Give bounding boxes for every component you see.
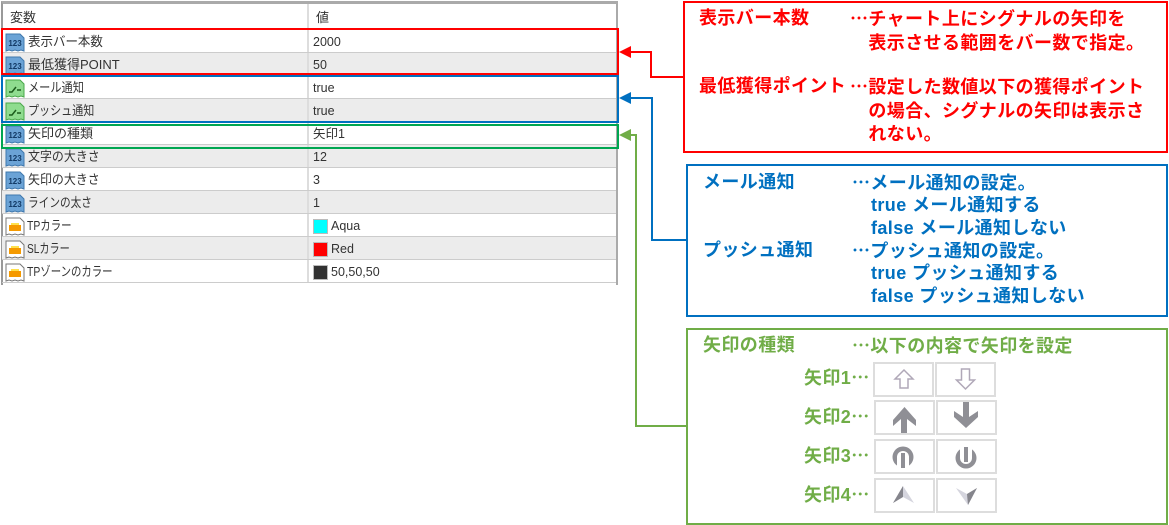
highlight: green row	[1, 124, 619, 149]
icon: arrow 3 down	[936, 439, 997, 474]
icon: arrow 4 up	[874, 478, 935, 513]
row: TP zone color: TPゾーンのカラー	[27, 264, 113, 279]
highlight: red rows	[1, 28, 619, 75]
row: text size: 123	[8, 154, 22, 163]
label: arrow 1: 矢印1…	[804, 364, 870, 390]
table frame	[1, 1, 618, 285]
header row	[10, 4, 329, 28]
icon: arrow 4 down	[936, 478, 997, 513]
description: min points	[850, 73, 1144, 144]
icon: arrow 3 up	[874, 439, 935, 474]
row: TP color	[2, 214, 616, 237]
header: variable: 変数	[10, 10, 36, 25]
row: arrow size: 123	[8, 177, 22, 186]
label: mail: メール通知	[703, 172, 795, 192]
description: push: true プッシュ通知する	[871, 263, 1059, 283]
row: min points	[2, 53, 616, 76]
label: min points: 最低獲得ポイント	[699, 76, 846, 96]
row: arrow size: 3	[313, 173, 320, 187]
panel: parameter table	[1, 1, 618, 285]
row: bars: 123	[8, 39, 22, 48]
row: mail: メール通知	[28, 80, 84, 95]
description: min points: …設定した数値以下の獲得ポイント	[850, 73, 1144, 99]
row: push: true	[313, 104, 335, 118]
row: line width: 1	[313, 196, 320, 210]
icon: arrow 1 up	[873, 362, 934, 397]
row: text size	[2, 145, 616, 168]
description: arrow type: …以下の内容で矢印を設定	[852, 332, 1073, 358]
row: push	[2, 99, 616, 122]
row: TP color: TPカラー	[27, 218, 72, 233]
highlight: blue rows	[1, 75, 619, 123]
description: push	[852, 236, 1085, 306]
description: bars	[850, 5, 1144, 52]
row: bars: 表示バー本数	[28, 34, 103, 49]
row: SL color: SLカラー	[27, 241, 70, 256]
row: text size: 文字の大きさ	[28, 149, 100, 164]
row: TP zone color	[2, 260, 616, 283]
row: line width	[2, 191, 616, 214]
label: push: プッシュ通知	[703, 240, 813, 260]
row: arrow size	[2, 168, 616, 191]
label: arrow 4: 矢印4…	[804, 481, 870, 507]
row: min points: 123	[8, 62, 22, 71]
description: bars: …チャート上にシグナルの矢印を	[850, 5, 1126, 31]
row: TP color: Aqua	[331, 219, 360, 233]
description: mail	[852, 168, 1067, 238]
description: mail: false メール通知しない	[871, 218, 1067, 238]
row: TP zone color: 50,50,50	[331, 265, 380, 279]
description: mail: …メール通知の設定。	[852, 168, 1036, 194]
description: min points: の場合、シグナルの矢印は表示さ	[868, 100, 1144, 120]
row: min points: 最低獲得POINT	[28, 57, 120, 72]
row: arrow type	[2, 122, 616, 145]
label: arrow 3: 矢印3…	[804, 442, 870, 468]
label: arrow type: 矢印の種類	[703, 335, 795, 355]
icon: arrow 2 down	[936, 400, 997, 435]
row: push: プッシュ通知	[28, 103, 94, 118]
icon: arrow 2 up	[874, 400, 935, 435]
description: bars: 表示させる範囲をバー数で指定。	[868, 32, 1144, 52]
panel: green callout	[686, 328, 1168, 525]
row: arrow type: 123	[8, 131, 22, 140]
header: value: 値	[316, 10, 329, 25]
label: bars: 表示バー本数	[699, 8, 809, 28]
icon: arrow 1 down	[935, 362, 996, 397]
row: mail	[2, 76, 616, 99]
row: text size: 12	[313, 150, 327, 164]
description: push: …プッシュ通知の設定。	[852, 236, 1054, 262]
panel: red callout	[683, 1, 1168, 153]
row: line width: 123	[8, 200, 22, 209]
description: mail: true メール通知する	[871, 195, 1041, 215]
row: arrow size: 矢印の大きさ	[28, 172, 100, 187]
row: min points: 50	[313, 58, 327, 72]
row: SL color: Red	[331, 242, 354, 256]
panel: blue callout	[686, 164, 1168, 317]
label: arrow 2: 矢印2…	[804, 403, 870, 429]
row: arrow type: 矢印1	[313, 127, 345, 141]
row: mail: true	[313, 81, 335, 95]
row: bars	[2, 30, 616, 53]
description: push: false プッシュ通知しない	[871, 286, 1085, 306]
row: line width: ラインの太さ	[28, 195, 92, 210]
row: SL color	[2, 237, 616, 260]
row: bars: 2000	[313, 35, 341, 49]
row: arrow type: 矢印の種類	[28, 126, 93, 141]
header column divider	[307, 4, 309, 29]
description: min points: れない。	[868, 124, 942, 144]
